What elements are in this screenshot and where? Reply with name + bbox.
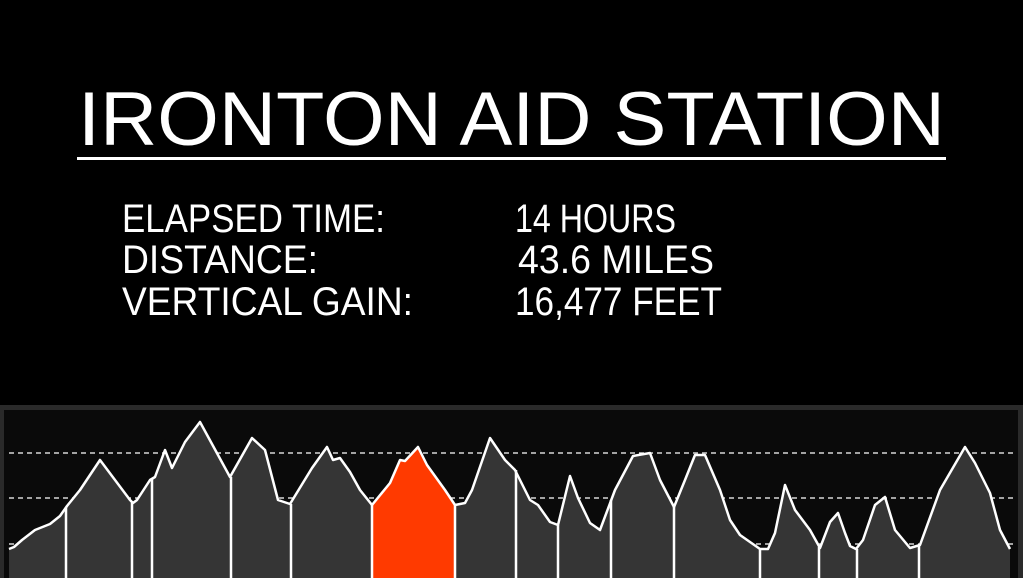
stat: elapsed time (122, 197, 676, 241)
stat: distance: DISTANCE: (122, 238, 318, 282)
profile area (9, 422, 1010, 578)
stat: vertical gain: 16,477 FEET (515, 280, 722, 324)
title: IRONTON AID STATION (78, 77, 945, 162)
stat: distance: 43.6 MILES (518, 238, 714, 282)
stat: vertical gain: VERTICAL GAIN: (122, 280, 413, 324)
stat: vertical gain (122, 280, 722, 324)
stats block (122, 197, 722, 324)
aid station markers (66, 470, 919, 578)
stat: elapsed time: 14 HOURS (515, 197, 676, 241)
elevation profile chart (0, 405, 1023, 578)
stat: elapsed time: ELAPSED TIME: (122, 197, 385, 241)
highlighted segment: Ironton (373, 450, 454, 578)
stat: distance (122, 238, 714, 282)
